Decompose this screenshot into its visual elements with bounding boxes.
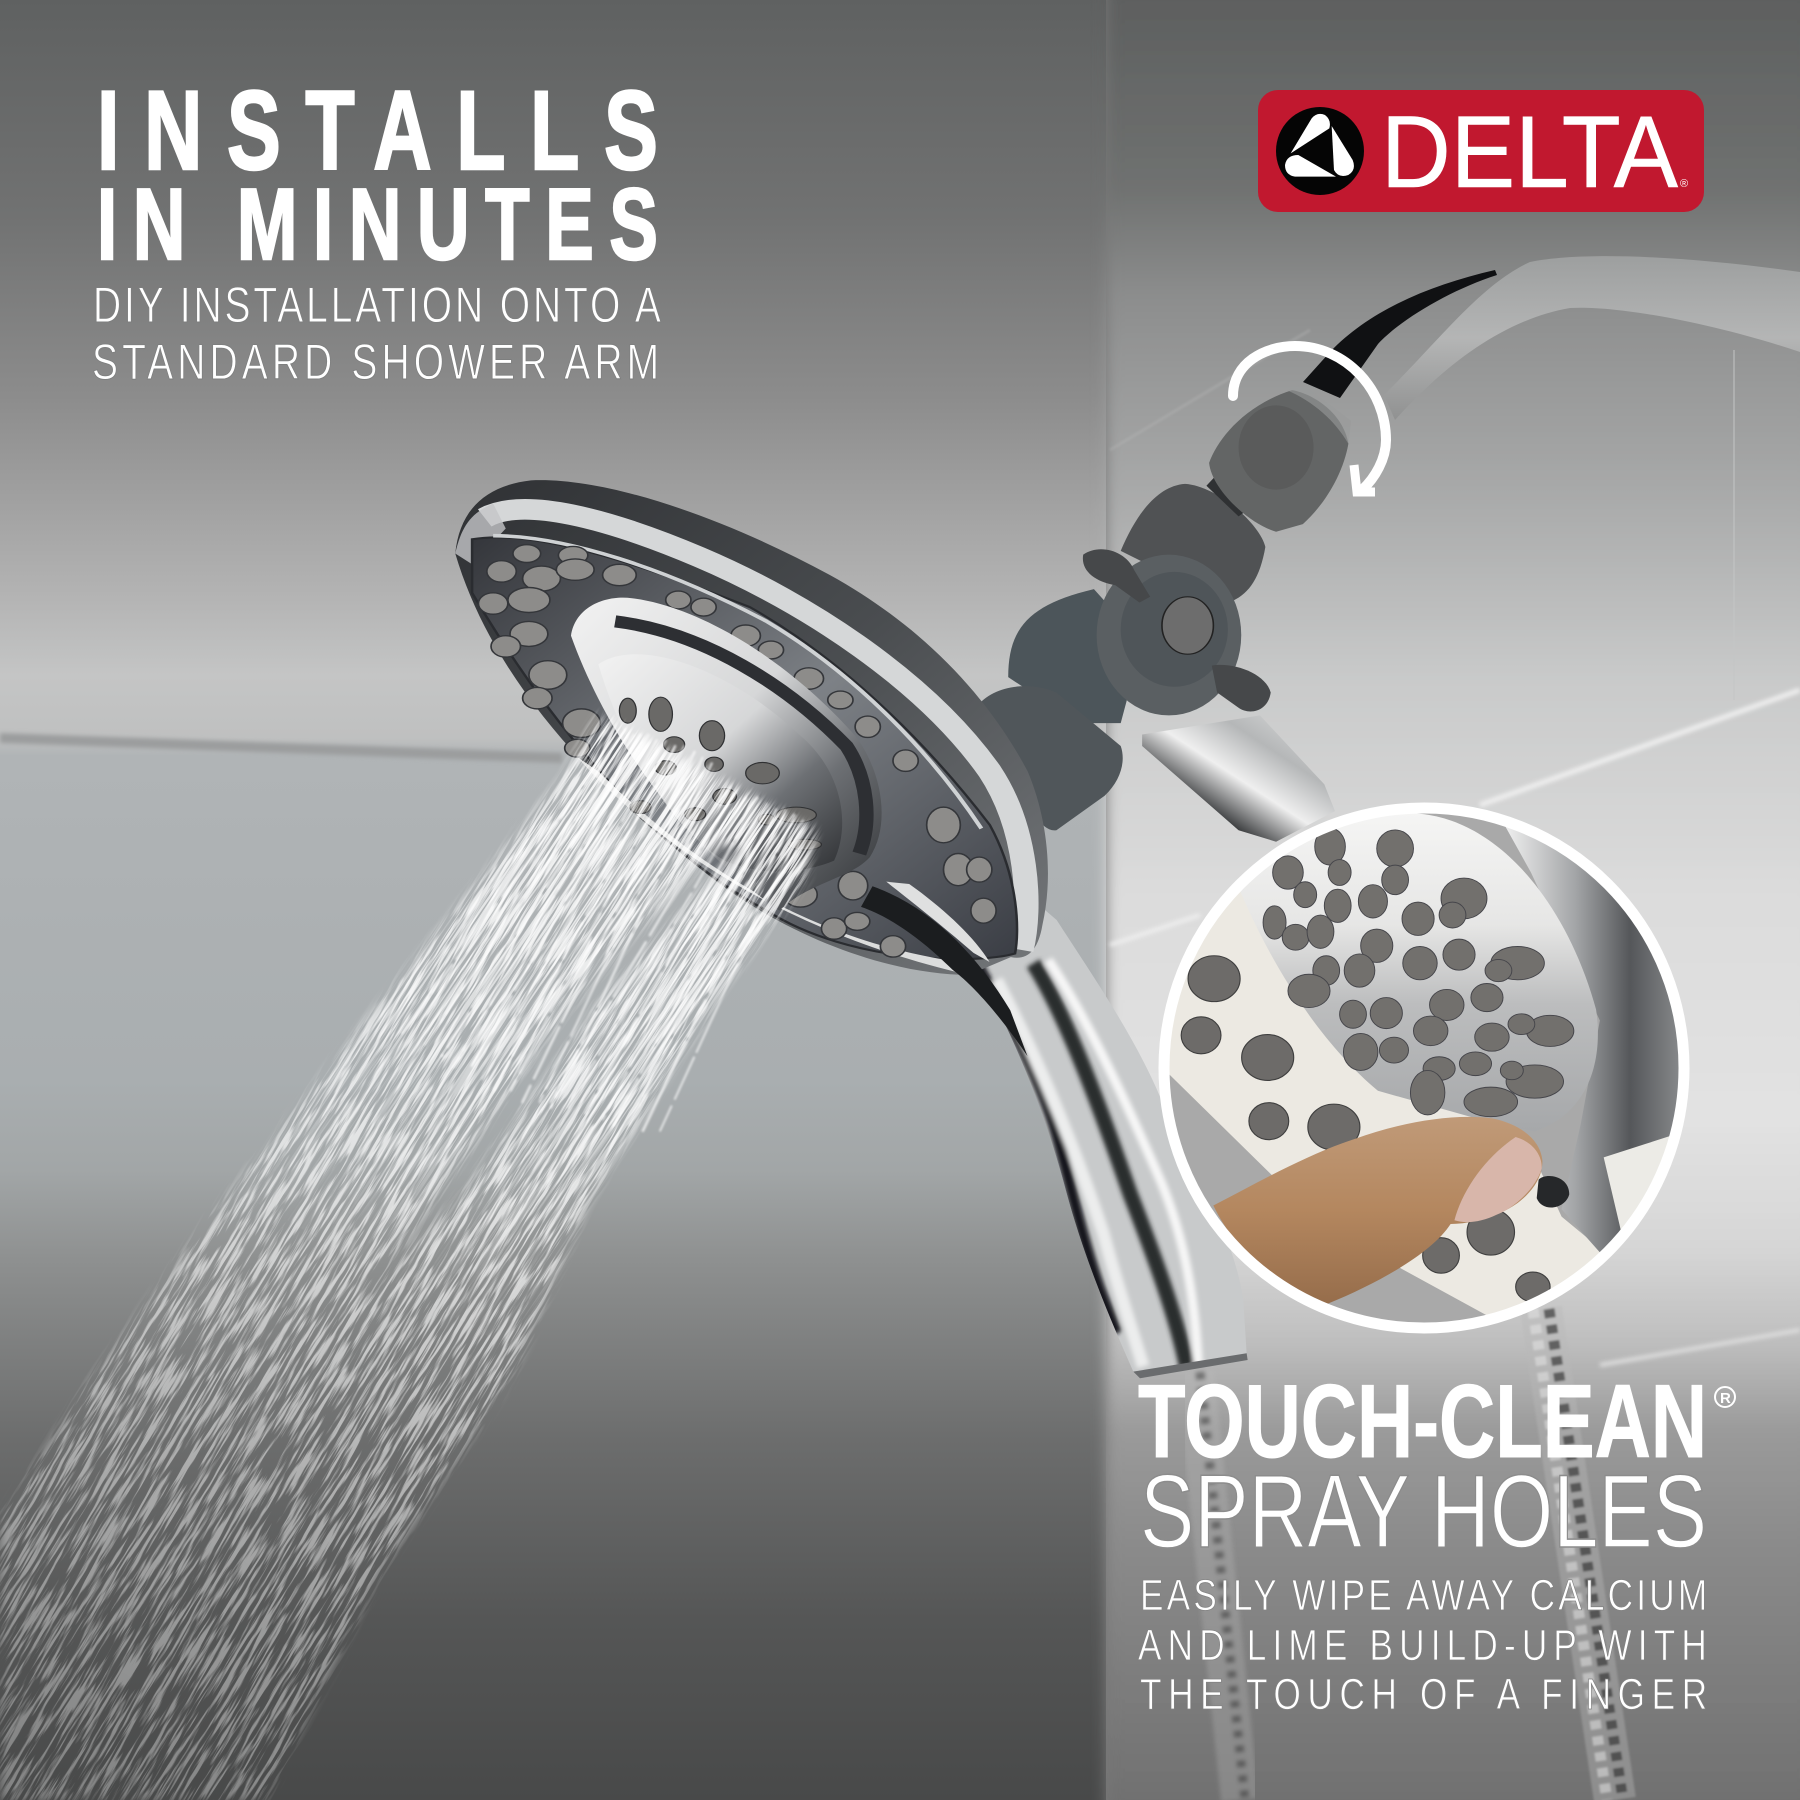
knob wing bottom [1212,665,1271,711]
hose: left [1195,1372,1245,1800]
right chrome side [1504,824,1684,1261]
hex nut [1209,390,1348,532]
description text: THE TOUCH OF A FINGER [1140,1670,1707,1719]
face reflection [493,536,981,829]
handle neck [861,882,1027,1056]
swivel connector [976,384,1351,842]
disc spray holes [1263,828,1574,1117]
long water streams [361,1201,499,1339]
delta logo: ® [1680,178,1688,190]
shower head [455,480,1048,975]
inset circle: finger wiping spray holes [1148,795,1700,1345]
subheading: diy installation: STANDARD SHOWER ARM [92,333,659,390]
water spray [361,729,804,1339]
outer plate [1170,892,1600,1315]
outer dome [455,480,1048,975]
fingernail [1454,1137,1542,1222]
knob [1097,555,1241,715]
description text [1138,1571,1707,1719]
heading: installs in minutes: INSTALLS [97,68,658,193]
upper joint [1121,484,1265,601]
lower chrome lip [577,757,977,975]
delta logo [1258,90,1704,212]
dish holes [478,545,996,957]
subheading: diy installation [92,276,661,390]
white ring [1164,808,1684,1328]
hand shower handle [982,910,1248,1378]
handheld head inner face [598,654,842,872]
logo wordmark: DELTA [1381,95,1678,209]
rotation arrow [1233,346,1386,492]
handheld head outer ring [571,598,882,911]
heading: installs in minutes: IN MINUTES [97,167,658,281]
shower arm [1303,256,1800,420]
knob wing top [1083,549,1150,603]
description text: EASILY WIPE AWAY CALCIUM [1140,1571,1707,1620]
subheading: diy installation: DIY INSTALLATION ONTO A [93,276,661,333]
spray streaks [402,729,804,1131]
swivel body [1008,589,1142,723]
hose: right [1533,1309,1623,1800]
chrome rim [485,509,1026,950]
spray face [472,537,1017,959]
spray droplets [361,1201,499,1339]
heading: installs in minutes [92,68,661,390]
registered mark [1715,1387,1735,1407]
circle photo [1170,814,1678,1322]
spray jets [619,697,821,850]
inner spray disc [1240,813,1598,1132]
outer plate holes [1181,956,1550,1302]
chrome pipe [1142,715,1335,842]
logo mark [1276,107,1364,195]
finger [1213,1117,1542,1304]
heading: touch-clean spray holes [1138,1364,1735,1719]
description text: AND LIME BUILD-UP WITH [1138,1621,1707,1670]
registered mark: R [1720,1390,1731,1407]
